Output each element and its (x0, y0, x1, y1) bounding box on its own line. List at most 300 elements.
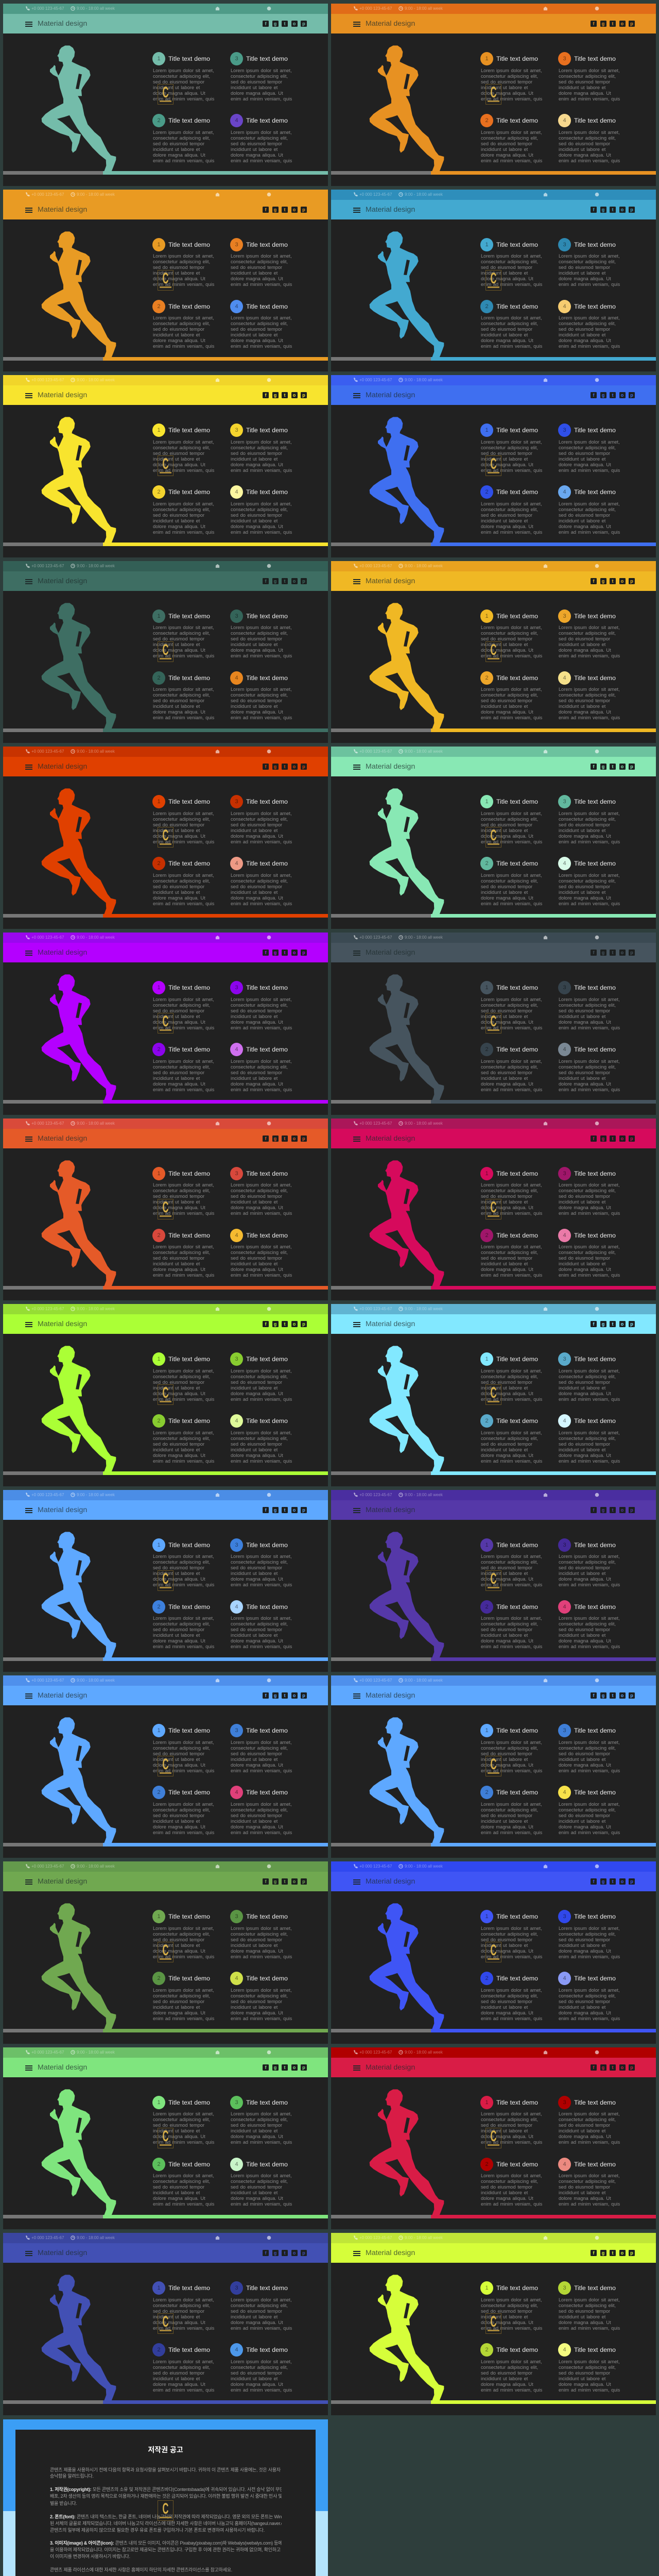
item 4: consectetur adipiscing elit, (231, 135, 288, 140)
item 3: sed do eiusmod tempor (231, 1008, 282, 1013)
item 2 (152, 2158, 230, 2214)
item 3 (230, 238, 292, 287)
header: f (593, 1136, 594, 1141)
item 4 (230, 1972, 307, 2028)
contact bar: +0 000 123-45-67 (359, 1864, 392, 1869)
header: g (602, 207, 604, 212)
item 2: sed do eiusmod tempor (481, 1442, 532, 1447)
watermark (485, 455, 501, 476)
item 2 (152, 300, 214, 349)
header: g (274, 1693, 276, 1698)
header: p (630, 764, 633, 769)
item 2: consectetur adipiscing elit, (481, 1621, 538, 1626)
item 3: 3 (235, 2099, 238, 2106)
contact bar: 9:00 - 18:00 all week (405, 1678, 443, 1683)
item 3 (230, 1724, 307, 1781)
item 2: consectetur adipiscing elit, (153, 1621, 210, 1626)
contact bar: +0 000 123-45-67 (31, 1121, 64, 1126)
item 3: consectetur adipiscing elit, (231, 1560, 288, 1565)
contact bar: 9:00 - 18:00 all week (77, 6, 115, 11)
item 4 (230, 300, 292, 349)
header: p (302, 1136, 305, 1141)
watermark (158, 1013, 174, 1033)
item 1: Lorem ipsum dolor sit amet, (481, 1554, 542, 1559)
item 1: dolore magna aliqua. Ut (153, 462, 205, 467)
item 4: consectetur adipiscing elit, (559, 1064, 616, 1070)
contact bar (3, 1675, 328, 1686)
item 3: consectetur adipiscing elit, (559, 73, 616, 78)
item 3: sed do eiusmod tempor (559, 2309, 610, 2314)
header: f (593, 2065, 594, 2070)
road: coloured section (431, 1843, 656, 1846)
item 2: sed do eiusmod tempor (153, 698, 204, 703)
watermark (485, 1384, 501, 1405)
item 4: Lorem ipsum dolor sit amet, (559, 1616, 620, 1621)
item 1: consectetur adipiscing elit, (481, 445, 538, 450)
item 3 (558, 609, 620, 658)
header: f (265, 393, 267, 398)
item 4: Title text demo (574, 117, 616, 124)
item 2: Title text demo (496, 860, 538, 867)
item 3: Lorem ipsum dolor sit amet, (231, 1926, 292, 1931)
intro text line 2: 승낙함을 알려드립니다. (50, 2473, 94, 2479)
contact bar: +0 000 123-45-67 (359, 1493, 392, 1497)
item 4: sed do eiusmod tempor (559, 2184, 610, 2190)
item 2: Lorem ipsum dolor sit amet, (153, 501, 214, 506)
item 3: Title text demo (246, 984, 288, 991)
item 3 (230, 609, 292, 658)
item 4: enim ad minim veniam, quis (231, 344, 292, 349)
item 1 (480, 1167, 558, 1224)
road: coloured section (431, 728, 656, 732)
item 4: dolore magna aliqua. Ut (231, 1081, 283, 1086)
header: g (602, 21, 604, 26)
item 2: incididunt ut labore et (153, 1076, 200, 1081)
item 4: sed do eiusmod tempor (231, 884, 282, 889)
item 4: enim ad minim veniam, quis (559, 901, 620, 906)
item 4: sed do eiusmod tempor (559, 327, 610, 332)
item 4 (558, 1229, 635, 1285)
item 4: incididunt ut labore et (559, 890, 605, 895)
runner silhouette (359, 774, 462, 923)
item 2: incididunt ut labore et (481, 2004, 528, 2009)
item 1: dolore magna aliqua. Ut (481, 1762, 533, 1768)
item 4: enim ad minim veniam, quis (559, 1459, 620, 1464)
item 2: consectetur adipiscing elit, (481, 1436, 538, 1441)
item 2: 2 (485, 1418, 489, 1424)
item 4: enim ad minim veniam, quis (231, 2015, 292, 2021)
header: Material design (366, 1134, 415, 1143)
item 2: Lorem ipsum dolor sit amet, (481, 1430, 542, 1435)
item 4 (230, 1414, 307, 1471)
item 2: dolore magna aliqua. Ut (481, 1638, 533, 1643)
item 1: Lorem ipsum dolor sit amet, (481, 2111, 542, 2116)
contact bar (3, 190, 328, 200)
item 3: consectetur adipiscing elit, (559, 1745, 616, 1751)
item 3: enim ad minim veniam, quis (231, 1954, 292, 1959)
item 1 (152, 52, 214, 101)
item 2: sed do eiusmod tempor (153, 1256, 204, 1261)
item 3: 3 (563, 1913, 566, 1920)
header: t (284, 1879, 285, 1884)
item 2: Lorem ipsum dolor sit amet, (153, 1430, 214, 1435)
watermark (158, 2313, 174, 2334)
header: Material design (38, 577, 87, 585)
item 4: incididunt ut labore et (559, 1819, 605, 1824)
item 4: dolore magna aliqua. Ut (231, 1267, 283, 1272)
road: coloured section (431, 1100, 656, 1104)
item 1: Lorem ipsum dolor sit amet, (153, 811, 214, 816)
item 3: incididunt ut labore et (231, 1571, 278, 1576)
item 2: incididunt ut labore et (153, 1819, 200, 1824)
item 1: enim ad minim veniam, quis (481, 96, 542, 101)
item 2: Lorem ipsum dolor sit amet, (153, 315, 214, 320)
item 4: sed do eiusmod tempor (231, 2370, 282, 2376)
watermark: C (163, 2128, 168, 2145)
item 4: dolore magna aliqua. Ut (559, 1081, 611, 1086)
item 4 (558, 1972, 635, 2028)
item 2: sed do eiusmod tempor (481, 2370, 532, 2376)
item 3: Title text demo (574, 1355, 616, 1363)
item 3: Lorem ipsum dolor sit amet, (559, 1182, 620, 1188)
item 2 (152, 1786, 230, 1842)
contact bar (331, 1861, 656, 1872)
panel: amber slide (3, 190, 328, 371)
item 4: dolore magna aliqua. Ut (559, 1824, 611, 1829)
header: o (621, 2250, 623, 2256)
item 3: Title text demo (574, 55, 616, 62)
item 2 (152, 1229, 230, 1285)
item 1: 1 (485, 56, 489, 62)
road: grey section (331, 1100, 431, 1104)
item 4: Lorem ipsum dolor sit amet, (559, 1058, 620, 1063)
item 3 (230, 423, 292, 473)
item 3: consectetur adipiscing elit, (559, 1560, 616, 1565)
item 1: dolore magna aliqua. Ut (481, 2320, 533, 2325)
item 3: consectetur adipiscing elit, (559, 2117, 616, 2122)
item 1: sed do eiusmod tempor (153, 1937, 204, 1942)
item 3: Lorem ipsum dolor sit amet, (231, 68, 292, 73)
item 2: incididunt ut labore et (153, 518, 200, 523)
header: p (630, 1693, 633, 1698)
item 4: Lorem ipsum dolor sit amet, (559, 1988, 620, 1993)
item 1: Lorem ipsum dolor sit amet, (481, 68, 542, 73)
item 1: sed do eiusmod tempor (481, 451, 532, 456)
watermark (158, 84, 174, 105)
item 1: sed do eiusmod tempor (481, 822, 532, 827)
item 3: 3 (563, 2285, 566, 2291)
item 1: Title text demo (168, 241, 210, 248)
header: f (265, 1507, 267, 1513)
item 1: dolore magna aliqua. Ut (153, 648, 205, 653)
header: Material design (38, 2063, 87, 2072)
item 1: incididunt ut labore et (153, 1571, 200, 1576)
item 4: Lorem ipsum dolor sit amet, (231, 2359, 292, 2364)
item 3 (230, 1910, 307, 1967)
item 3 (558, 1724, 635, 1781)
road: coloured section (103, 914, 328, 918)
road: coloured section (103, 1843, 328, 1846)
runner silhouette (370, 417, 444, 543)
item 2: consectetur adipiscing elit, (153, 1807, 210, 1812)
road: grey section (331, 1471, 431, 1475)
item 3: incididunt ut labore et (231, 2314, 278, 2319)
item 1: Title text demo (496, 1170, 538, 1177)
item 1: incididunt ut labore et (481, 84, 528, 90)
item 2: 2 (157, 1232, 161, 1239)
item 2: 2 (157, 2161, 161, 2167)
item 2: Lorem ipsum dolor sit amet, (153, 1058, 214, 1063)
watermark (158, 1942, 174, 1962)
header (331, 571, 656, 591)
item 2: Title text demo (496, 2346, 538, 2353)
header: Material design (38, 1320, 87, 1328)
header (331, 2058, 656, 2077)
contact bar (331, 2233, 656, 2243)
contact bar: 9:00 - 18:00 all week (77, 749, 115, 754)
item 1: enim ad minim veniam, quis (481, 839, 542, 844)
item 4 (230, 671, 292, 720)
header: t (284, 21, 285, 26)
item 2: dolore magna aliqua. Ut (153, 152, 205, 158)
item 3: dolore magna aliqua. Ut (559, 2134, 611, 2139)
item 4: enim ad minim veniam, quis (559, 1644, 620, 1649)
item 3: sed do eiusmod tempor (559, 451, 610, 456)
road: grey section (3, 171, 103, 175)
item 2: 2 (157, 1975, 161, 1981)
item 4: enim ad minim veniam, quis (231, 2201, 292, 2207)
item 2: enim ad minim veniam, quis (481, 2201, 542, 2207)
item 3: enim ad minim veniam, quis (559, 653, 620, 658)
item 3: enim ad minim veniam, quis (559, 1954, 620, 1959)
item 1: sed do eiusmod tempor (153, 1008, 204, 1013)
header: o (293, 21, 296, 26)
item 1: Lorem ipsum dolor sit amet, (153, 68, 214, 73)
contact bar: 9:00 - 18:00 all week (77, 1678, 115, 1683)
item 1: dolore magna aliqua. Ut (153, 834, 205, 839)
runner silhouette (41, 603, 116, 728)
item 3: Lorem ipsum dolor sit amet, (231, 1740, 292, 1745)
item 1: Lorem ipsum dolor sit amet, (153, 253, 214, 259)
watermark: C (163, 2313, 168, 2330)
item 1: Lorem ipsum dolor sit amet, (481, 625, 542, 630)
item 2: dolore magna aliqua. Ut (153, 1081, 205, 1086)
item 1: sed do eiusmod tempor (153, 265, 204, 270)
item 2: sed do eiusmod tempor (481, 884, 532, 889)
item 2: dolore magna aliqua. Ut (153, 895, 205, 901)
item 3: 3 (235, 242, 238, 248)
item 2: enim ad minim veniam, quis (153, 1830, 214, 1835)
item 1: Lorem ipsum dolor sit amet, (153, 1740, 214, 1745)
item 3: sed do eiusmod tempor (559, 636, 610, 641)
item 2 (152, 485, 214, 535)
watermark: C (491, 1199, 496, 1216)
item 2: dolore magna aliqua. Ut (481, 2196, 533, 2201)
header: g (274, 1507, 276, 1513)
item 4: incididunt ut labore et (231, 146, 278, 151)
header: g (274, 21, 276, 26)
panel: purple slide (3, 933, 328, 1115)
item 2: incididunt ut labore et (153, 1261, 200, 1266)
item 1: 1 (485, 2285, 489, 2291)
item 1 (152, 1724, 230, 1781)
contact bar (331, 2047, 656, 2058)
item 2: enim ad minim veniam, quis (153, 1459, 214, 1464)
watermark (158, 2500, 174, 2521)
item 1: 1 (157, 1356, 161, 1362)
item 1: consectetur adipiscing elit, (481, 2117, 538, 2122)
item 3: dolore magna aliqua. Ut (559, 1948, 611, 1954)
item 4: enim ad minim veniam, quis (559, 344, 620, 349)
watermark (158, 827, 174, 848)
item 1: consectetur adipiscing elit, (481, 1188, 538, 1193)
item 1: consectetur adipiscing elit, (153, 1374, 210, 1379)
item 1: sed do eiusmod tempor (153, 822, 204, 827)
item 4: incididunt ut labore et (559, 1447, 605, 1452)
header (331, 200, 656, 219)
item 1: enim ad minim veniam, quis (153, 1768, 214, 1773)
header: o (293, 1507, 296, 1513)
item 3 (558, 1352, 635, 1409)
item 1: 1 (157, 613, 161, 619)
item 3: sed do eiusmod tempor (231, 265, 282, 270)
item 1: dolore magna aliqua. Ut (153, 276, 205, 281)
header: f (265, 579, 267, 584)
panel: olive green slide (3, 1861, 328, 2044)
header: Material design (366, 391, 415, 399)
item 1: sed do eiusmod tempor (481, 1194, 532, 1199)
item 4: Title text demo (246, 674, 288, 682)
item 4: Title text demo (246, 1417, 288, 1425)
item 4: incididunt ut labore et (231, 2376, 278, 2381)
item 1: dolore magna aliqua. Ut (481, 1391, 533, 1396)
runner silhouette (359, 2075, 462, 2224)
item 3: consectetur adipiscing elit, (231, 1931, 288, 1936)
item 1: Lorem ipsum dolor sit amet, (481, 1182, 542, 1188)
item 1: dolore magna aliqua. Ut (153, 2134, 205, 2139)
item 1: incididunt ut labore et (481, 1571, 528, 1576)
item 2: sed do eiusmod tempor (153, 2370, 204, 2376)
road: grey section (331, 171, 431, 175)
item 3: enim ad minim veniam, quis (231, 1025, 292, 1030)
item 4: incididunt ut labore et (559, 704, 605, 709)
item 1 (480, 1352, 558, 1409)
item 2: Title text demo (496, 2161, 538, 2168)
item 3: 3 (563, 1727, 566, 1734)
road: grey section (3, 2400, 103, 2404)
header (331, 1500, 656, 1520)
item 1: consectetur adipiscing elit, (153, 1745, 210, 1751)
item 4: enim ad minim veniam, quis (559, 1273, 620, 1278)
road: grey section (3, 1471, 103, 1475)
item 1: consectetur adipiscing elit, (481, 817, 538, 822)
item 3: consectetur adipiscing elit, (231, 1374, 288, 1379)
item 3: Lorem ipsum dolor sit amet, (231, 1182, 292, 1188)
item 1: incididunt ut labore et (481, 2128, 528, 2133)
item 3: sed do eiusmod tempor (231, 1194, 282, 1199)
watermark (485, 1013, 501, 1033)
watermark: C (163, 827, 168, 844)
item 3: 3 (235, 1356, 238, 1362)
item 4: incididunt ut labore et (231, 2004, 278, 2009)
item 4 (558, 1043, 635, 1099)
watermark: C (163, 455, 168, 472)
header (3, 385, 328, 405)
item 3: Lorem ipsum dolor sit amet, (559, 2111, 620, 2116)
item 2: dolore magna aliqua. Ut (481, 1267, 533, 1272)
item 3: Title text demo (574, 427, 616, 434)
item 2: enim ad minim veniam, quis (153, 901, 214, 906)
item 1: incididunt ut labore et (481, 1199, 528, 1205)
item 3: dolore magna aliqua. Ut (559, 462, 611, 467)
item 3: 3 (563, 2099, 566, 2106)
watermark (158, 1384, 174, 1405)
item 2: sed do eiusmod tempor (153, 884, 204, 889)
watermark: C (491, 1570, 496, 1587)
header: t (284, 764, 285, 769)
panel: golden slide (331, 561, 656, 743)
item 4: 4 (563, 2347, 566, 2353)
header: Material design (366, 1320, 415, 1328)
header: o (293, 2250, 296, 2256)
item 3: enim ad minim veniam, quis (231, 1582, 292, 1587)
runner silhouette (370, 231, 444, 357)
item 3: consectetur adipiscing elit, (559, 631, 616, 636)
item 2: consectetur adipiscing elit, (153, 878, 210, 884)
header: f (593, 1693, 594, 1698)
contact bar: +0 000 123-45-67 (31, 1493, 64, 1497)
road: coloured section (431, 1657, 656, 1661)
item 2: enim ad minim veniam, quis (153, 2201, 214, 2207)
item 2 (480, 671, 542, 720)
item 3: consectetur adipiscing elit, (231, 445, 288, 450)
header: f (593, 1879, 594, 1884)
item 2: incididunt ut labore et (153, 704, 200, 709)
header: g (602, 2065, 604, 2070)
item 4: incididunt ut labore et (559, 518, 605, 523)
item 1: sed do eiusmod tempor (153, 2309, 204, 2314)
item 2: consectetur adipiscing elit, (153, 692, 210, 698)
item 2: sed do eiusmod tempor (153, 1813, 204, 1818)
item 4: Lorem ipsum dolor sit amet, (559, 1244, 620, 1249)
item 4: enim ad minim veniam, quis (231, 901, 292, 906)
item 3: dolore magna aliqua. Ut (231, 1762, 283, 1768)
item 1: Lorem ipsum dolor sit amet, (153, 1368, 214, 1374)
item 1: incididunt ut labore et (481, 1757, 528, 1762)
item 1 (480, 2096, 558, 2153)
item 3: Title text demo (246, 1355, 288, 1363)
panel: mint slide (331, 747, 656, 929)
item 4: enim ad minim veniam, quis (231, 1459, 292, 1464)
item 1: dolore magna aliqua. Ut (481, 1577, 533, 1582)
road: coloured section (431, 357, 656, 361)
item 4: Lorem ipsum dolor sit amet, (559, 873, 620, 878)
item 4: consectetur adipiscing elit, (231, 507, 288, 512)
item 4: Title text demo (246, 2346, 288, 2353)
panel: teal slide (3, 4, 328, 186)
item 3: enim ad minim veniam, quis (559, 1025, 620, 1030)
item 2: sed do eiusmod tempor (481, 1627, 532, 1632)
header (3, 757, 328, 776)
item 1: incididunt ut labore et (153, 84, 200, 90)
item 4: 4 (563, 2161, 566, 2167)
header: f (265, 1693, 267, 1698)
runner silhouette (359, 1146, 462, 1295)
item 2: consectetur adipiscing elit, (481, 878, 538, 884)
item 3: consectetur adipiscing elit, (231, 259, 288, 264)
item 2 (480, 1414, 558, 1471)
runner silhouette (31, 1331, 134, 1481)
